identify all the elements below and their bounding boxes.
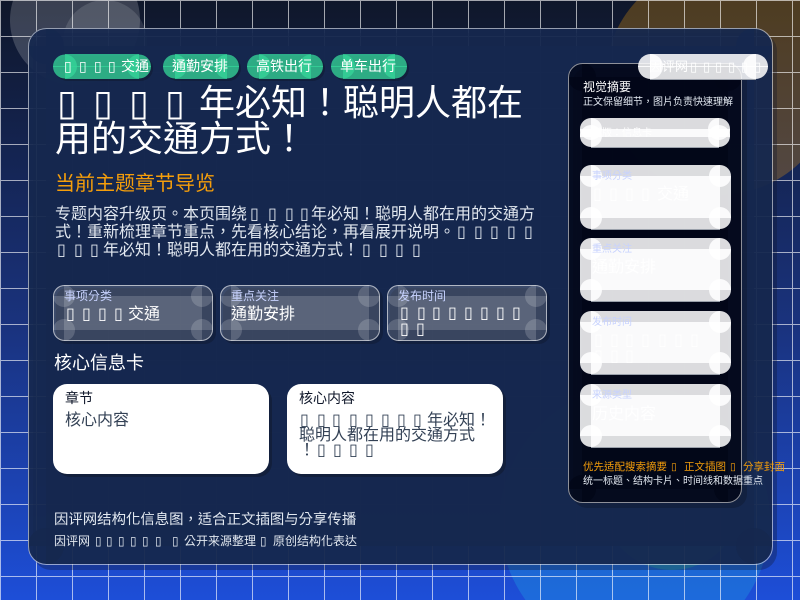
panel: visual summary <box>568 63 785 508</box>
summary card: category: 交通 <box>657 180 689 204</box>
chip: focus <box>220 285 383 344</box>
chip: focus: 通勤安排 <box>231 300 295 324</box>
chip: date: ▯▯▯▯▯▯▯▯ <box>400 303 521 322</box>
summary card: date: ▯▯▯ <box>594 346 634 365</box>
intro text <box>55 200 535 260</box>
chip: category: ▯▯▯▯ <box>66 304 123 323</box>
chip: category: 交通 <box>128 300 160 324</box>
pill: bike: 单车出行 <box>340 56 396 76</box>
summary card: category <box>580 165 731 230</box>
card: core content: ！ <box>299 436 315 460</box>
core info heading: 核心信息卡 <box>54 349 144 375</box>
summary card: source: 来源类型 <box>592 386 632 401</box>
brand pill: ▯▯▯▯▯▯ <box>690 60 761 75</box>
footer source: 公开来源整理 <box>184 532 256 549</box>
summary card: source: 历史内容 <box>592 400 656 424</box>
summary usage note: ▯ <box>730 461 736 473</box>
pill: rail <box>247 54 325 81</box>
card: core content <box>287 384 506 477</box>
summary card: category: ▯▯▯▯ <box>593 184 650 203</box>
card: core content: ▯▯▯▯▯▯▯▯ <box>300 410 422 429</box>
pill: transport: ▯▯▯▯ <box>64 59 116 75</box>
pill: commute: 通勤安排 <box>172 56 228 76</box>
pill: commute <box>163 54 241 81</box>
intro text: ▯▯▯▯ <box>250 204 309 223</box>
card: core content: 核心内容 <box>299 388 355 408</box>
summary card: date: 发布时间 <box>592 313 632 328</box>
chip: focus: 重点关注 <box>231 287 279 304</box>
intro text: 式！重新梳理章节重点，先看核心结论，再看展开说明。 <box>55 218 455 242</box>
intro text: 年必知！聪明人都在用的交通方 <box>311 200 535 224</box>
summary card: template: 模版：信息卡 <box>592 124 652 139</box>
brand pill <box>638 54 768 80</box>
summary subheading: 正文保留细节，图片负责快速理解 <box>583 93 733 108</box>
summary card: category: 事项分类 <box>592 167 632 182</box>
summary usage note: 分享封面 <box>743 459 785 474</box>
pill: bike <box>331 54 409 81</box>
chip: date: ▯▯ <box>400 319 425 338</box>
title: 用的交通方式！ <box>55 110 307 162</box>
chip: category: 事项分类 <box>64 287 112 304</box>
card: core content: 年必知！ <box>427 406 491 430</box>
chip: category <box>53 285 216 344</box>
section heading: 当前主题章节导览 <box>55 167 215 196</box>
summary card: source <box>580 384 731 448</box>
title <box>55 74 523 162</box>
summary usage note: 正文插图 <box>684 459 726 474</box>
card: chapter: 章节 <box>65 388 93 408</box>
summary card: date: ▯▯▯▯▯▯▯ <box>594 330 699 349</box>
summary card: date <box>580 311 731 374</box>
footer source: 因评网 <box>54 532 90 549</box>
summary description: 统一标题、结构卡片、时间线和数据重点 <box>583 472 763 487</box>
footer note: 因评网结构化信息图，适合正文插图与分享传播 <box>54 508 356 529</box>
card: core content: ▯▯▯▯ <box>317 440 374 459</box>
brand pill: 因评网 <box>649 56 688 75</box>
summary usage note: ▯ <box>671 461 677 473</box>
card: chapter: 核心内容 <box>65 406 129 430</box>
card: core content: 聪明人都在用的交通方式 <box>299 421 475 445</box>
summary card: template <box>580 118 730 148</box>
title: ▯▯▯▯ <box>57 83 185 124</box>
pill: transport: 交通 <box>121 56 149 76</box>
pill: transport <box>53 54 153 81</box>
summary card: focus: 通勤安排 <box>592 253 656 277</box>
footer source: 原创结构化表达 <box>273 532 357 549</box>
intro text: 专题内容升级页。本页围绕 <box>55 200 247 224</box>
intro text: ▯▯▯▯ <box>362 240 421 259</box>
intro text: 年必知！聪明人都在用的交通方式！ <box>103 236 359 260</box>
chip: date: 发布时间 <box>398 287 446 304</box>
pill: rail: 高铁出行 <box>256 56 312 76</box>
summary heading: 视觉摘要 <box>583 78 631 95</box>
summary usage note: 优先适配搜索摘要 <box>583 459 667 474</box>
title: 年必知！聪明人都在 <box>199 74 523 126</box>
intro text: ▯▯▯▯▯ <box>457 222 533 241</box>
chip: date <box>387 285 550 344</box>
summary card: focus: 重点关注 <box>592 240 632 255</box>
footer source: ▯▯▯▯▯▯▯ <box>95 534 179 548</box>
metric chips <box>53 285 550 344</box>
intro text: ▯▯▯ <box>57 240 99 259</box>
footer source: ▯ <box>260 534 267 548</box>
card: chapter <box>53 384 272 477</box>
summary card: focus <box>580 238 731 302</box>
tag pills <box>53 54 409 81</box>
